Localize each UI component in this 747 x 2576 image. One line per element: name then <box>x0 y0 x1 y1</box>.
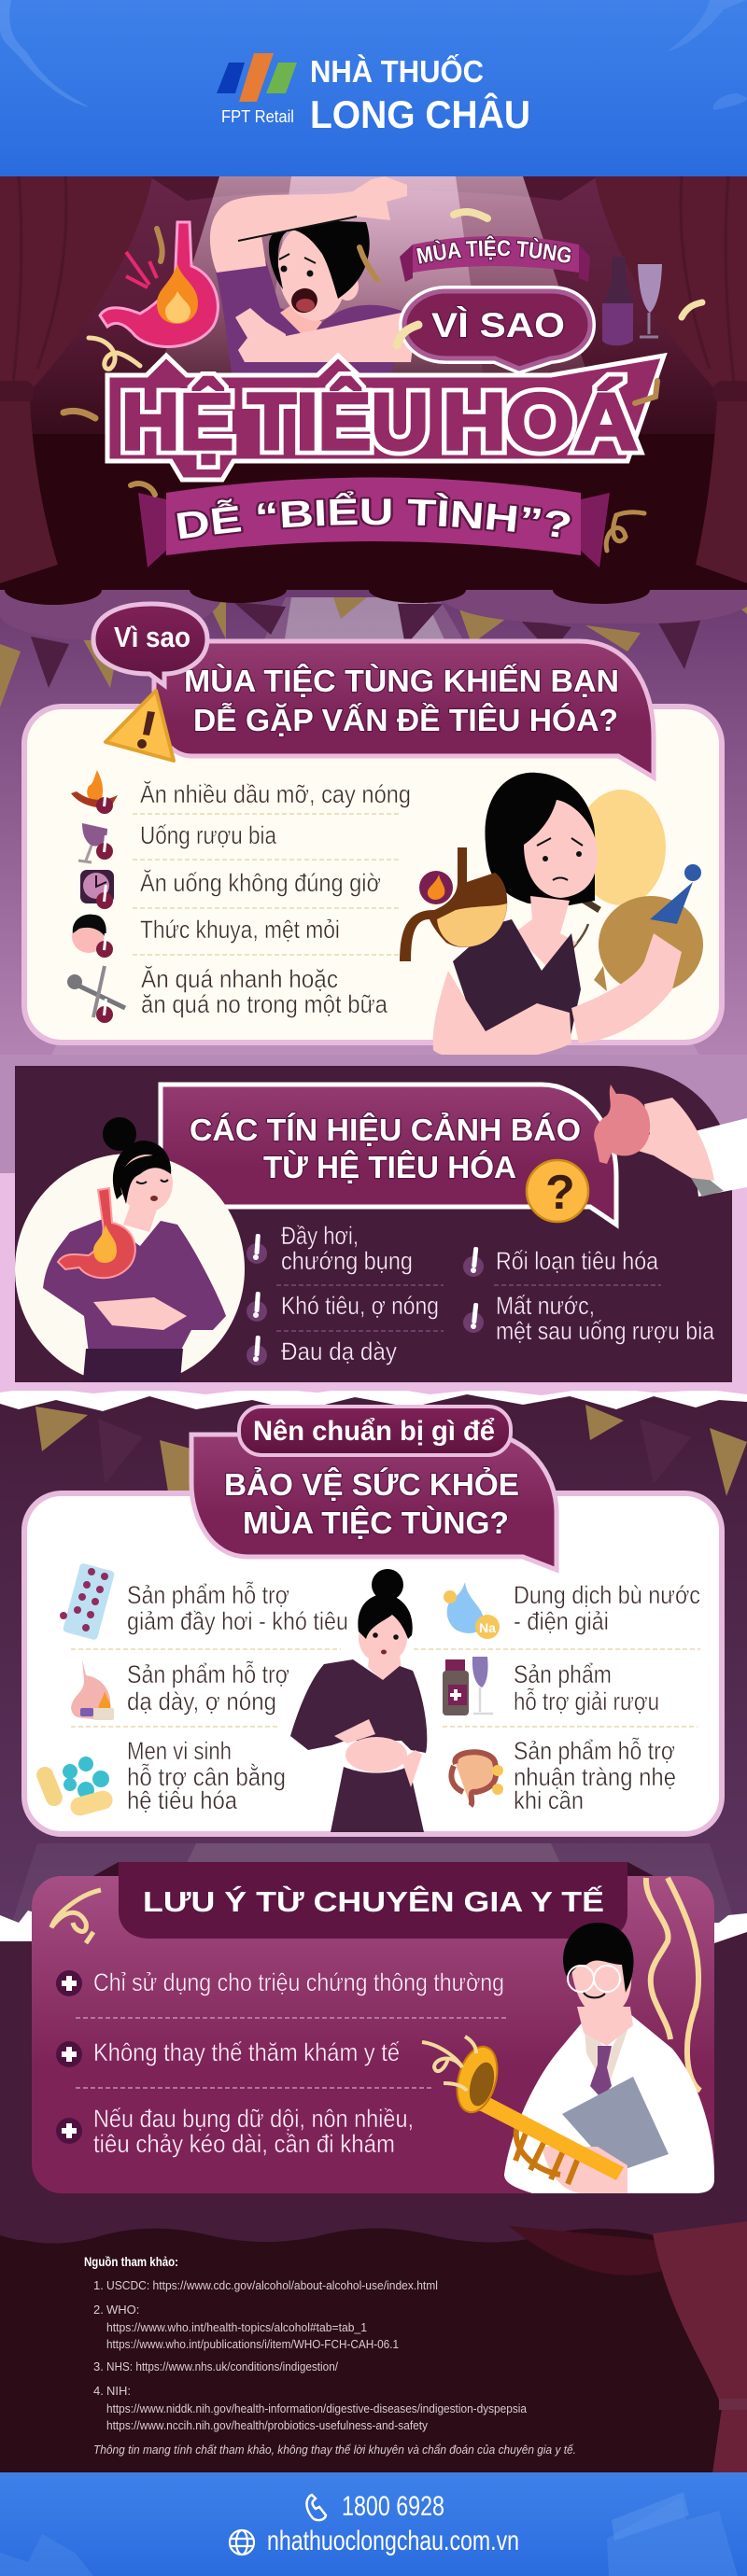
heading banner: section one: MÙA TIỆC TÙNG KHIẾN BẠN <box>184 664 619 698</box>
text block: references: https://www.nccih.nih.gov/health/probiotics-usefulness-and-safety <box>106 2418 428 2432</box>
text: note three line two: tiêu chảy kéo dài, cần đi khám <box>93 2130 395 2158</box>
text: LONG CHÂU: LONG CHÂU <box>310 91 530 136</box>
text block: references: WHO: <box>106 2303 139 2317</box>
text block: references: 3. <box>93 2359 104 2373</box>
text: laxative support line three: khi cần <box>514 1786 584 1814</box>
text block: references: 2. <box>93 2303 104 2317</box>
heading banner: section two: CÁC TÍN HIỆU CẢNH BÁO <box>190 1113 581 1147</box>
icon: plus 3 <box>56 2118 82 2144</box>
panel: header <box>0 0 747 177</box>
text: references heading: Nguồn tham khảo: <box>84 2254 178 2269</box>
text: NHÀ THUỐC: NHÀ THUỐC <box>310 53 484 89</box>
text: probiotics: Men vi sinh <box>127 1737 232 1765</box>
text: phone number: 1800 6928 <box>342 2491 444 2522</box>
decoration: valance <box>0 590 747 640</box>
panel: warning signals <box>15 1066 747 1391</box>
text: staying up late: Thức khuya, mệt mỏi <box>140 916 340 944</box>
icon: plus 1 <box>56 1970 82 1996</box>
illustration: worried woman <box>433 773 682 1060</box>
icon: alert 5 <box>463 1303 484 1333</box>
decoration: stage edge scallops <box>5 575 650 605</box>
list: warning signals <box>247 1222 715 1365</box>
icon: alert 2 <box>247 1292 267 1322</box>
icon: clock <box>80 870 114 909</box>
text: bloating line two: chướng bụng <box>281 1247 413 1275</box>
panel: hero stage <box>0 175 747 583</box>
illustration: shocked man <box>210 176 413 373</box>
title: HỆ TIÊU HOÁ: HỆ <box>121 377 233 467</box>
text: stomach pain: Đau dạ dày <box>281 1337 397 1365</box>
text: stomach support line two: dạ dày, ợ nóng <box>127 1687 276 1715</box>
panel: lower background <box>0 1911 747 2473</box>
text block: references: Thông tin mang tính chất tham khảo, không thay thế lời khuyên và chẩn đoán của chuyên gia y tế. <box>93 2443 576 2457</box>
text: probiotics line three: hệ tiêu hóa <box>127 1786 238 1814</box>
icon: blister pack <box>60 1562 115 1641</box>
icon: plus 2 <box>56 2041 82 2067</box>
icon: probiotics <box>34 1757 115 1818</box>
text: digestive disorder: Rối loạn tiêu hóa <box>496 1247 659 1275</box>
text: laxative support: Sản phẩm hỗ trợ <box>514 1736 675 1765</box>
icon: spoon and fork <box>67 966 125 1023</box>
title: HỆ TIÊU HOÁ: HOÁ <box>443 378 638 467</box>
text: stomach support: Sản phẩm hỗ trợ <box>127 1659 289 1688</box>
title: HỆ TIÊU HOÁ: TIÊU <box>247 377 429 467</box>
heading banner: section two: TỪ HỆ TIÊU HÓA <box>263 1150 516 1184</box>
text: probiotics line two: hỗ trợ cân bằng <box>127 1762 286 1791</box>
text: dehydration: Mất nước, <box>496 1292 595 1320</box>
illustration: lower right curtain <box>509 2221 747 2473</box>
ribbon: DỄ BIỂU TÌNH: DỄ “BIỂU TÌNH”? <box>175 489 572 541</box>
text block: references: NHS: https://www.nhs.uk/conditions/indigestion/ <box>106 2359 338 2373</box>
ribbon: MÙA TIỆC TÙNG: MÙA TIỆC TÙNG <box>416 234 571 265</box>
decoration: bunting flags <box>35 1405 747 1496</box>
illustration: stomach with reflux <box>400 847 507 961</box>
pill: what to prepare <box>239 1407 511 1455</box>
title: HỆ TIÊU HOÁ: TIÊU <box>247 377 429 467</box>
icon: water drop with electrolytes: Na <box>479 1620 496 1635</box>
heading banner: section one <box>154 641 654 777</box>
illustration: woman with heartburn <box>43 1117 226 1391</box>
icon: warning triangle <box>106 691 174 761</box>
heading banner: expert notes <box>119 1862 627 1939</box>
text: eating too much: ăn quá no trong một bữa <box>141 990 388 1018</box>
panel: section three background <box>0 1383 747 1960</box>
text block: references: https://www.who.int/publications/i/item/WHO-FCH-CAH-06.1 <box>106 2337 399 2351</box>
title: HỆ TIÊU HOÁ: HỆ <box>121 377 233 467</box>
text: rehydration line two: - điện giải <box>514 1607 609 1635</box>
icon: medicine bottle and glass <box>443 1657 493 1715</box>
heading banner: section three: BẢO VỆ SỨC KHỎE <box>224 1467 519 1502</box>
text: website: nhathuoclongchau.com.vn <box>267 2526 519 2556</box>
icon: water drop with electrolytes <box>444 1582 500 1639</box>
decoration: curl <box>51 1890 101 1943</box>
heading banner: section two <box>161 1085 616 1225</box>
text: laxative support line two: nhuận tràng nhẹ <box>514 1763 676 1791</box>
list: expert notes <box>56 1968 507 2158</box>
ribbon: DỄ BIỂU TÌNH <box>138 478 610 567</box>
curtain: right <box>595 176 747 583</box>
panel: medical expert notes <box>32 1862 714 2193</box>
text: fatty food: Ăn nhiều dầu mỡ, cay nóng <box>140 780 411 808</box>
text: FPT Retail: FPT Retail <box>221 107 294 126</box>
illustration: balloons <box>560 790 703 993</box>
decoration: confetti <box>63 212 702 551</box>
heading banner: section three: MÙA TIỆC TÙNG? <box>243 1505 509 1540</box>
title: HỆ TIÊU HOÁ <box>107 356 664 480</box>
decoration: streamers <box>646 1878 700 2091</box>
panel: section one background <box>0 575 747 1073</box>
panel: what to prepare <box>24 1407 722 1834</box>
decoration: trumpet confetti <box>422 2037 476 2091</box>
panel: footer <box>0 2472 747 2576</box>
heading banner: expert notes: LƯU Ý TỪ CHUYÊN GIA Y TẾ <box>143 1884 604 1918</box>
icon: question coin <box>527 1160 588 1222</box>
icon: phone <box>306 2495 326 2520</box>
text block: references: USCDC: https://www.cdc.gov/alcohol/about-alcohol-use/index.html <box>106 2278 438 2292</box>
icon: stomach and tablets <box>71 1659 114 1720</box>
icon: globe <box>230 2530 254 2555</box>
text: note three: Nếu đau bụng dữ dội, nôn nhiều, <box>93 2105 414 2133</box>
curtain: left <box>0 176 152 583</box>
decoration: bunting flags <box>0 597 747 707</box>
icon: tired face <box>72 915 113 958</box>
icon: wine glass <box>78 823 113 862</box>
text: reference one: 1. <box>93 2278 104 2292</box>
text: bloating support: Sản phẩm hỗ trợ <box>127 1580 289 1609</box>
text: note one: Chỉ sử dụng cho triệu chứng thông thường <box>93 1968 504 1996</box>
bubble: VÌ SAO: VÌ SAO <box>431 306 565 344</box>
illustration: bottle and glass <box>602 257 662 345</box>
text: rehydration: Dung dịch bù nước <box>514 1581 700 1609</box>
icon: intestine <box>451 1752 503 1806</box>
text: bloating: Đầy hơi, <box>281 1222 359 1250</box>
icon: chili and flame <box>71 770 118 814</box>
text: note two: Không thay thế thăm khám y tế <box>93 2038 400 2066</box>
text block: references: https://www.niddk.nih.gov/health-information/digestive-diseases/indigestion-dyspepsia <box>106 2401 528 2415</box>
text: alcohol: Uống rượu bia <box>140 821 277 849</box>
icon: flame circle <box>419 871 453 904</box>
text: eating too fast: Ăn quá nhanh hoặc <box>141 965 338 993</box>
text block: references: 4. <box>93 2384 104 2398</box>
panel: why party season causes digestive problems <box>24 604 722 1060</box>
pill: what to prepare: Nên chuẩn bị gì để <box>253 1416 495 1447</box>
bubble: Vì sao <box>93 604 207 685</box>
icon: alert 4 <box>463 1247 484 1277</box>
text: irregular meals: Ăn uống không đúng giờ <box>140 869 381 897</box>
title: HỆ TIÊU HOÁ: HOÁ <box>443 378 638 467</box>
illustration: hand holding stomach <box>594 1085 747 1197</box>
text: indigestion: Khó tiêu, ợ nóng <box>281 1292 439 1320</box>
text block: references <box>84 2254 576 2457</box>
text: bloating support line two: giảm đầy hơi - khó tiêu <box>127 1607 348 1635</box>
text block: references: https://www.who.int/health-topics/alcohol#tab=tab_1 <box>106 2320 367 2334</box>
icon: FPT logo <box>217 53 297 102</box>
text: hangover support line two: hỗ trợ giải rượu <box>514 1687 659 1715</box>
illustration: stomach with flame <box>100 222 218 346</box>
text: tired after drinking: mệt sau uống rượu bia <box>496 1317 715 1345</box>
panel: section two background <box>0 1055 747 1400</box>
icon: alert 3 <box>247 1336 267 1365</box>
list: causes <box>67 770 411 1023</box>
illustration: circle backdrop <box>15 1154 245 1385</box>
bubble: Vì sao: Vì sao <box>114 621 190 653</box>
text: hangover support: Sản phẩm <box>514 1660 612 1688</box>
ribbon: MÙA TIỆC TÙNG <box>400 234 590 282</box>
heading banner: section three <box>191 1435 557 1570</box>
text block: references: NIH: <box>106 2384 131 2398</box>
heading banner: section one: DỄ GẶP VẤN ĐỀ TIÊU HÓA? <box>193 703 618 737</box>
illustration: doctor with trumpet <box>450 1923 714 2193</box>
bubble: VÌ SAO <box>404 291 590 369</box>
illustration: woman with bloated belly <box>290 1569 427 1832</box>
icon: question coin: ? <box>545 1166 575 1220</box>
icon: alert 1 <box>247 1234 267 1264</box>
